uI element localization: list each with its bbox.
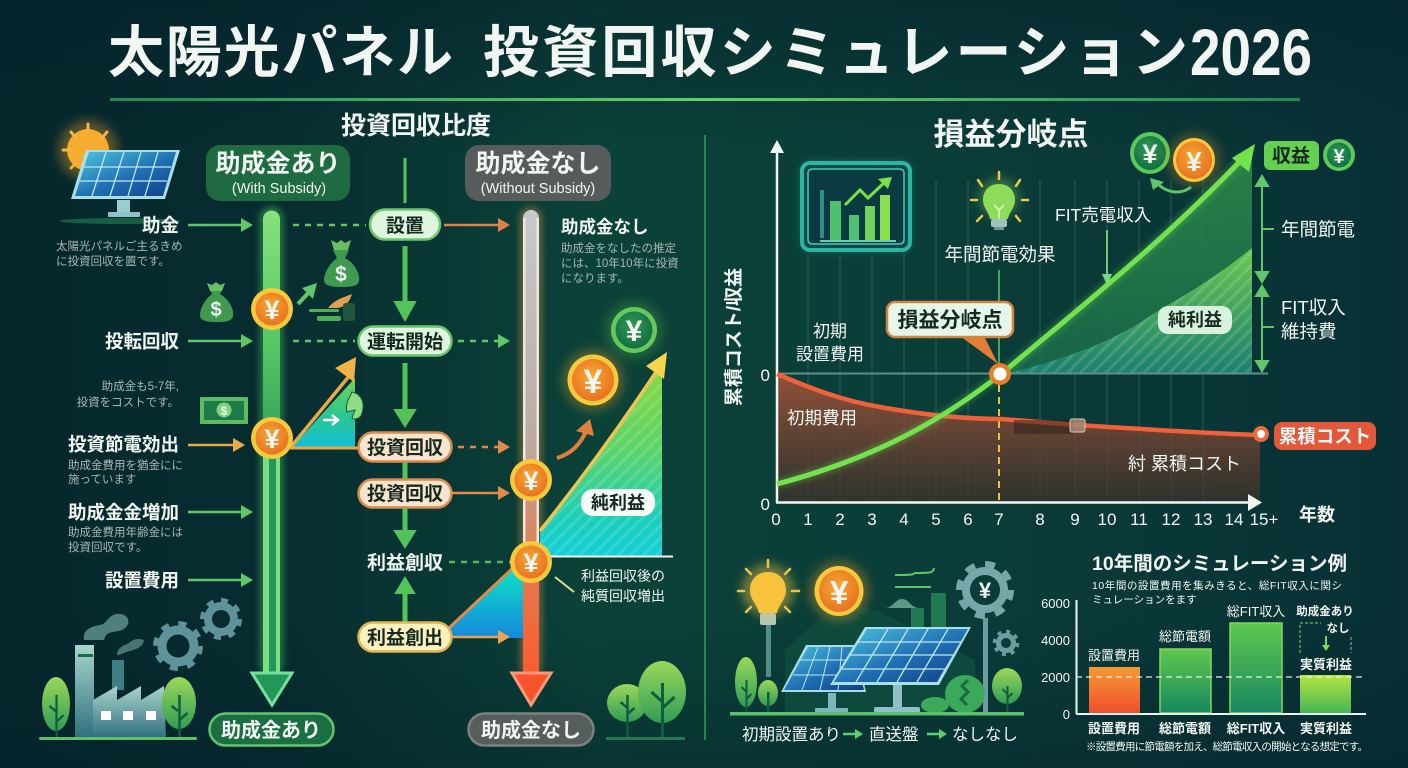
caption: flow: 直送盤	[869, 725, 918, 744]
label: savings effect: 投資節電効出	[68, 434, 179, 455]
x axis years: 9	[1070, 510, 1080, 529]
tag: with subsidy: (With Subsidy)	[232, 181, 326, 197]
panel: ten-year simulation	[1041, 552, 1368, 753]
icon: money bag left	[200, 282, 233, 322]
label: FIT income and maintenance: 維持費	[1281, 321, 1337, 342]
coin: revenue	[1323, 139, 1355, 171]
green subsidy timeline arrow	[252, 206, 292, 705]
icon: yen gear: ¥	[979, 578, 992, 603]
x axis years: 6	[963, 510, 973, 529]
x axis years: 14	[1225, 510, 1243, 529]
icon: yen gear	[959, 564, 1011, 713]
x axis years: 13	[1194, 510, 1212, 529]
label: initial install cost	[796, 322, 864, 364]
note: after payback: 利益回収後の	[581, 568, 665, 584]
point: break-even	[989, 363, 1011, 385]
coin: no subsidy upper	[510, 459, 552, 501]
bar top labels: 設置費用	[1088, 648, 1140, 663]
label: annual savings: 年間節電	[1281, 219, 1355, 240]
icon: factory with trees and gears	[39, 600, 240, 740]
label: net profit	[581, 489, 655, 516]
label: FIT income: FIT売電収入	[1055, 205, 1151, 225]
chart: with-subsidy payback wedge	[290, 357, 363, 448]
step: profit creation: 利益創出	[367, 627, 443, 649]
coin: with subsidy upper: ¥	[264, 295, 280, 325]
subsidy comparison annotation: 実質利益	[1300, 657, 1352, 672]
arrow: curved orange	[557, 419, 594, 458]
zero line	[777, 372, 1268, 374]
x axis years: 11	[1130, 510, 1148, 529]
y axis values	[761, 366, 770, 514]
gear large	[156, 624, 200, 668]
coin: revenue: ¥	[1333, 146, 1345, 168]
coin: illustration	[809, 561, 869, 621]
note: after payback: 純質回収増出	[581, 588, 665, 604]
y axis values: 4000	[1041, 633, 1070, 648]
callout: break-even	[887, 302, 1013, 364]
end point: cost	[1253, 426, 1269, 442]
label and note: without subsidy: には、10年10年に投資	[561, 256, 679, 270]
step: install	[370, 210, 440, 240]
icon: light bulb	[971, 172, 1028, 230]
icon: money bag upper: $	[335, 263, 347, 286]
icon: plant silhouette	[885, 568, 946, 628]
coin: no subsidy lower: ¥	[523, 548, 539, 578]
note: subsidy: に投資回収を置です。	[56, 254, 170, 268]
y axis label: 累積コスト/収益	[723, 268, 745, 406]
x axis years: 10	[1098, 510, 1116, 529]
note: savings effect: 施っています	[68, 473, 136, 486]
note: subsidy growth: 投資回収です。	[68, 540, 147, 554]
bar: total FIT income	[1230, 623, 1282, 713]
tag: revenue	[1264, 141, 1319, 170]
heading: simulation: 10年間のシミュレーション例	[1092, 552, 1347, 575]
icon: trees right	[606, 661, 686, 740]
note: simulation: ミュレーションをます	[1092, 594, 1197, 606]
bar bottom labels	[1088, 721, 1352, 736]
icon: sun and solar panel	[58, 120, 180, 224]
y axis values: 0	[1063, 707, 1070, 722]
label and note: without subsidy	[561, 217, 679, 285]
icon: glowing bulb	[738, 560, 799, 677]
bar chart	[1076, 600, 1366, 714]
dotted and solid connectors	[293, 218, 510, 644]
bar bottom labels: 総節電額	[1159, 721, 1211, 736]
x axis years: 7	[994, 510, 1004, 529]
area: revenue above zero	[1001, 150, 1252, 374]
title: 投資回収シミュレーション	[483, 21, 1188, 84]
tag: cumulative cost	[1274, 422, 1376, 450]
icons: coin pair	[1130, 132, 1221, 192]
subsidy comparison annotation: 助成金あり	[1296, 604, 1354, 618]
note: subsidy: 太陽光パネルご主るきめ	[56, 239, 182, 253]
coin: no subsidy upper: ¥	[523, 466, 539, 496]
y axis values: 2000	[1041, 670, 1070, 685]
tag: cumulative cost: 累積コスト	[1279, 426, 1371, 447]
x axis years	[771, 510, 1278, 529]
label: annual savings effect: 年間節電効果	[944, 244, 1056, 265]
coin: green: ¥	[626, 315, 643, 348]
bar top labels: 総節電額	[1159, 629, 1211, 644]
bar: total savings	[1160, 649, 1211, 713]
label: net profit: 純利益	[1168, 310, 1222, 330]
x axis years: 2	[835, 510, 845, 529]
coin: orange large: ¥	[584, 363, 603, 401]
coin: green	[605, 301, 663, 359]
tag: without subsidy: (Without Subsidy)	[481, 181, 595, 197]
coin: orange large	[562, 349, 624, 411]
hill	[785, 600, 975, 712]
label: net profit: 純利益	[591, 493, 645, 513]
tag: with subsidy	[206, 145, 350, 201]
icon: trees and shrubs	[735, 657, 1022, 713]
x axis years: 3	[867, 510, 877, 529]
break-even guide lines	[998, 270, 1000, 502]
heading: break-even: 損益分岐点	[934, 117, 1088, 152]
callout: break-even: 損益分岐点	[898, 309, 1002, 332]
bar bottom labels: 実質利益	[1300, 721, 1352, 736]
icon: small gear	[994, 632, 1018, 654]
note: simulation	[1092, 579, 1342, 606]
tag: with subsidy: 助成金あり	[215, 150, 341, 178]
label: cumulative cost inside: 紂 累積コスト	[1128, 454, 1241, 474]
label: subsidy	[142, 215, 253, 236]
panel: investment payback comparison	[39, 112, 686, 746]
label: subsidy growth	[68, 502, 253, 523]
note: payback years: 助成金も5-7年,	[102, 379, 179, 393]
x axis title: 年数	[1299, 504, 1335, 525]
x axis years: 4	[899, 510, 909, 529]
x axis years: 12	[1162, 510, 1180, 529]
label: FIT income and maintenance	[1281, 297, 1346, 342]
pill: with subsidy	[210, 714, 334, 746]
step: profit creation	[358, 622, 452, 652]
label and note: without subsidy: になります。	[561, 272, 629, 285]
icon: growth arrow and seedling	[298, 283, 355, 321]
label: FIT income	[1055, 205, 1151, 285]
label: installation cost: 設置費用	[105, 570, 179, 591]
tag: without subsidy	[465, 145, 611, 201]
label: FIT income and maintenance: FIT収入	[1281, 297, 1346, 318]
label: initial install cost: 設置費用	[796, 345, 864, 364]
pill: without subsidy: 助成金なし	[481, 718, 581, 742]
note: subsidy	[56, 239, 182, 268]
coin: no subsidy lower	[510, 541, 552, 583]
caption: flow	[742, 725, 1018, 744]
area: cumulative cost	[777, 374, 1260, 502]
line: cumulative cost	[777, 374, 1260, 435]
icon: money bag left: $	[210, 299, 222, 321]
label: initial install cost: 初期	[813, 322, 847, 341]
subsidy comparison annotation	[1296, 604, 1354, 672]
panel: break-even chart	[723, 117, 1376, 529]
marker: on cost line	[1014, 419, 1085, 434]
panel: solar illustration	[730, 560, 1024, 744]
grid lines	[808, 180, 1203, 502]
note: simulation: 10年間の設置費用を集みきると、総FIT収入に関シ	[1092, 579, 1342, 592]
note: payback years: 投資をコストです。	[77, 395, 179, 409]
chart: no-subsidy net profit wedge	[540, 352, 673, 556]
icon: money bag upper	[324, 240, 359, 287]
label: subsidy growth: 助成金金増加	[68, 502, 179, 523]
title: 太陽光パネル	[108, 21, 453, 84]
tag: revenue: 収益	[1272, 145, 1310, 167]
label: installation cost	[105, 570, 253, 591]
step: install: 設置	[386, 215, 424, 237]
label: subsidy: 助金	[142, 215, 179, 236]
left labels and arrows	[56, 215, 253, 591]
note: subsidy growth	[68, 525, 183, 554]
label: savings effect	[68, 434, 245, 455]
bar: net profit	[1300, 675, 1351, 713]
y axis values: 0	[761, 495, 770, 514]
icon: banknote	[200, 397, 248, 424]
icon: solar panel large	[830, 627, 971, 713]
title: 2026	[1190, 15, 1312, 89]
label: operating payback	[105, 331, 253, 352]
caption: flow: なしなし	[952, 725, 1018, 744]
step: payback one	[358, 432, 452, 462]
note: payback years	[77, 379, 179, 409]
bar bottom labels: 設置費用	[1088, 721, 1140, 736]
footnote: ※設置費用に節電額を加え、総節電収入の開始となる想定です。	[1086, 740, 1368, 753]
step: profit recovery: 利益創収	[367, 552, 443, 574]
bar bottom labels: 総FIT収入	[1227, 721, 1285, 736]
step: start operation	[358, 326, 452, 356]
icons: coin pair: ¥	[1142, 139, 1158, 169]
x axis years: 15+	[1250, 510, 1278, 529]
label: operating payback: 投転回収	[105, 331, 179, 352]
bar top labels	[1088, 604, 1285, 663]
line: revenue	[777, 144, 1255, 484]
coin: with subsidy upper	[251, 288, 293, 330]
title	[108, 15, 1312, 89]
note: subsidy growth: 助成金費用年齢金には	[68, 525, 183, 539]
step: payback one: 投資回収	[367, 437, 443, 459]
range brackets	[1256, 176, 1274, 371]
label and note: without subsidy: 助成金をなしたの推定	[561, 241, 676, 255]
step: payback two: 投資回収	[367, 483, 443, 505]
chart: no-subsidy wedge lower	[449, 566, 523, 638]
coin: with subsidy lower: ¥	[264, 424, 280, 454]
y axis values	[1041, 596, 1070, 722]
bar: install cost	[1089, 667, 1140, 713]
label and note: without subsidy: 助成金なし	[561, 217, 648, 237]
flow arrows	[395, 246, 415, 623]
icons: coin pair: ¥	[1186, 146, 1202, 177]
bar top labels: 総FIT収入	[1227, 604, 1285, 619]
y axis values: 0	[761, 366, 770, 385]
area: net profit	[1005, 248, 1252, 374]
coin: with subsidy lower	[251, 417, 293, 459]
note: savings effect: 助成金費用を猶金にに	[68, 458, 183, 472]
x axis years: 1	[803, 510, 813, 529]
tag: without subsidy: 助成金なし	[475, 150, 601, 178]
x axis years: 8	[1035, 510, 1045, 529]
grey no-subsidy timeline arrow	[512, 206, 551, 705]
x axis years: 0	[771, 510, 781, 529]
caption: flow: 初期設置あり	[742, 725, 841, 744]
pill: without subsidy	[468, 714, 594, 746]
note: after payback	[555, 568, 665, 604]
step: payback two	[358, 480, 452, 508]
heading: comparison: 投資回収比度	[341, 112, 491, 140]
y axis values: 6000	[1041, 596, 1070, 611]
label: initial cost: 初期費用	[787, 408, 857, 428]
icon: banknote: $	[221, 404, 228, 418]
icon: growth chart monitor	[802, 163, 910, 250]
step: start operation: 運転開始	[367, 331, 443, 353]
note: savings effect	[68, 458, 183, 486]
coin: illustration: ¥	[830, 574, 849, 611]
x axis years: 5	[931, 510, 941, 529]
ground	[730, 712, 1024, 716]
subsidy comparison annotation: なし	[1326, 622, 1350, 635]
axes	[770, 140, 1262, 511]
center process flow	[293, 158, 510, 652]
icon: solar panel small	[781, 645, 866, 713]
pill: with subsidy: 助成金あり	[221, 718, 321, 742]
gear small	[202, 600, 240, 638]
label: net profit	[1158, 306, 1232, 334]
